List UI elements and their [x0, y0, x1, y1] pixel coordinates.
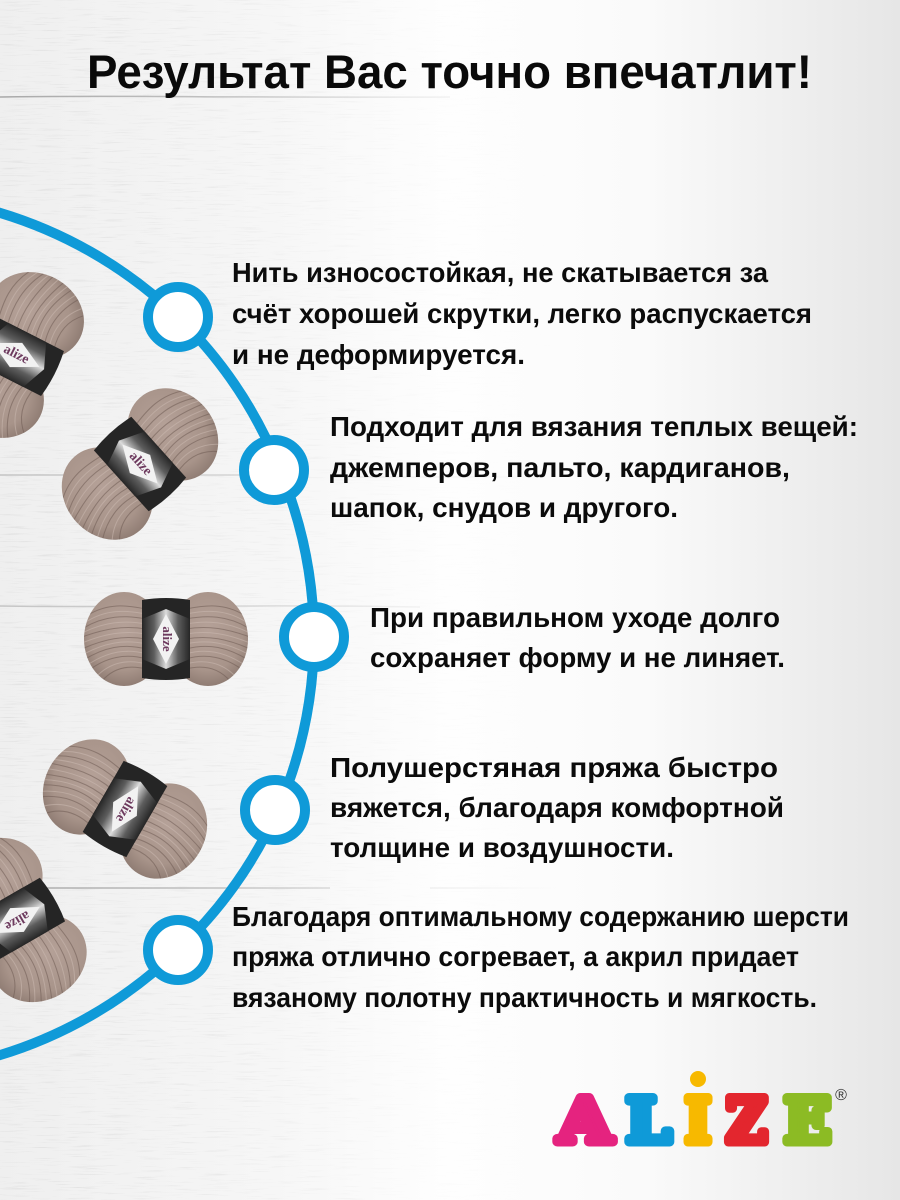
yarn skein 3 — [82, 592, 250, 686]
marker 5 — [148, 920, 208, 980]
text block 1: счёт хорошей скрутки, легко распускается — [232, 298, 812, 329]
text block 2: Подходит для вязания теплых вещей: — [330, 411, 858, 442]
text block 2 — [330, 411, 858, 523]
yarn skein 5 — [0, 819, 104, 1021]
yarn skein 4 — [24, 722, 226, 896]
text block 4: толщине и воздушности. — [330, 832, 674, 863]
ALIZE logo: A — [557, 1086, 614, 1157]
text block 3: При правильном уходе долго — [370, 602, 780, 633]
text block 5: Благодаря оптимальному содержанию шерсти — [232, 901, 849, 932]
ALIZE logo: L — [626, 1086, 671, 1157]
yarn skein 1 — [0, 254, 100, 456]
ALIZE logo: E — [784, 1086, 831, 1157]
marker 4 — [245, 780, 305, 840]
text block 2: шапок, снудов и другого. — [330, 492, 678, 523]
text block 1: и не деформируется. — [232, 339, 525, 370]
ALIZE logo — [557, 1071, 847, 1157]
blue arc with circular markers — [0, 210, 344, 1058]
text block 4: вяжется, благодаря комфортной — [330, 792, 784, 823]
marker 2 — [244, 440, 304, 500]
text block 5 — [232, 901, 849, 1013]
text block 4 — [330, 752, 784, 863]
title: Результат Вас точно впечатлит! — [87, 45, 812, 98]
ALIZE logo: I — [685, 1086, 711, 1157]
text block 1: Нить износостойкая, не скатывается за — [232, 257, 768, 288]
yarn skein 2 — [41, 368, 239, 560]
marker 3 — [284, 607, 344, 667]
ALIZE logo: ® — [835, 1087, 847, 1104]
ALIZE logo: Z — [726, 1086, 767, 1157]
text block 3 — [370, 602, 785, 673]
marker 1 — [148, 287, 208, 347]
text block 3: сохраняет форму и не линяет. — [370, 642, 785, 673]
text block 4: Полушерстяная пряжа быстро — [330, 752, 778, 783]
text block 5: вязаному полотну практичность и мягкость. — [232, 982, 817, 1013]
text block 1 — [232, 257, 812, 370]
text block 5: пряжа отлично согревает, а акрил придает — [232, 941, 799, 972]
text block 2: джемперов, пальто, кардиганов, — [330, 452, 790, 483]
